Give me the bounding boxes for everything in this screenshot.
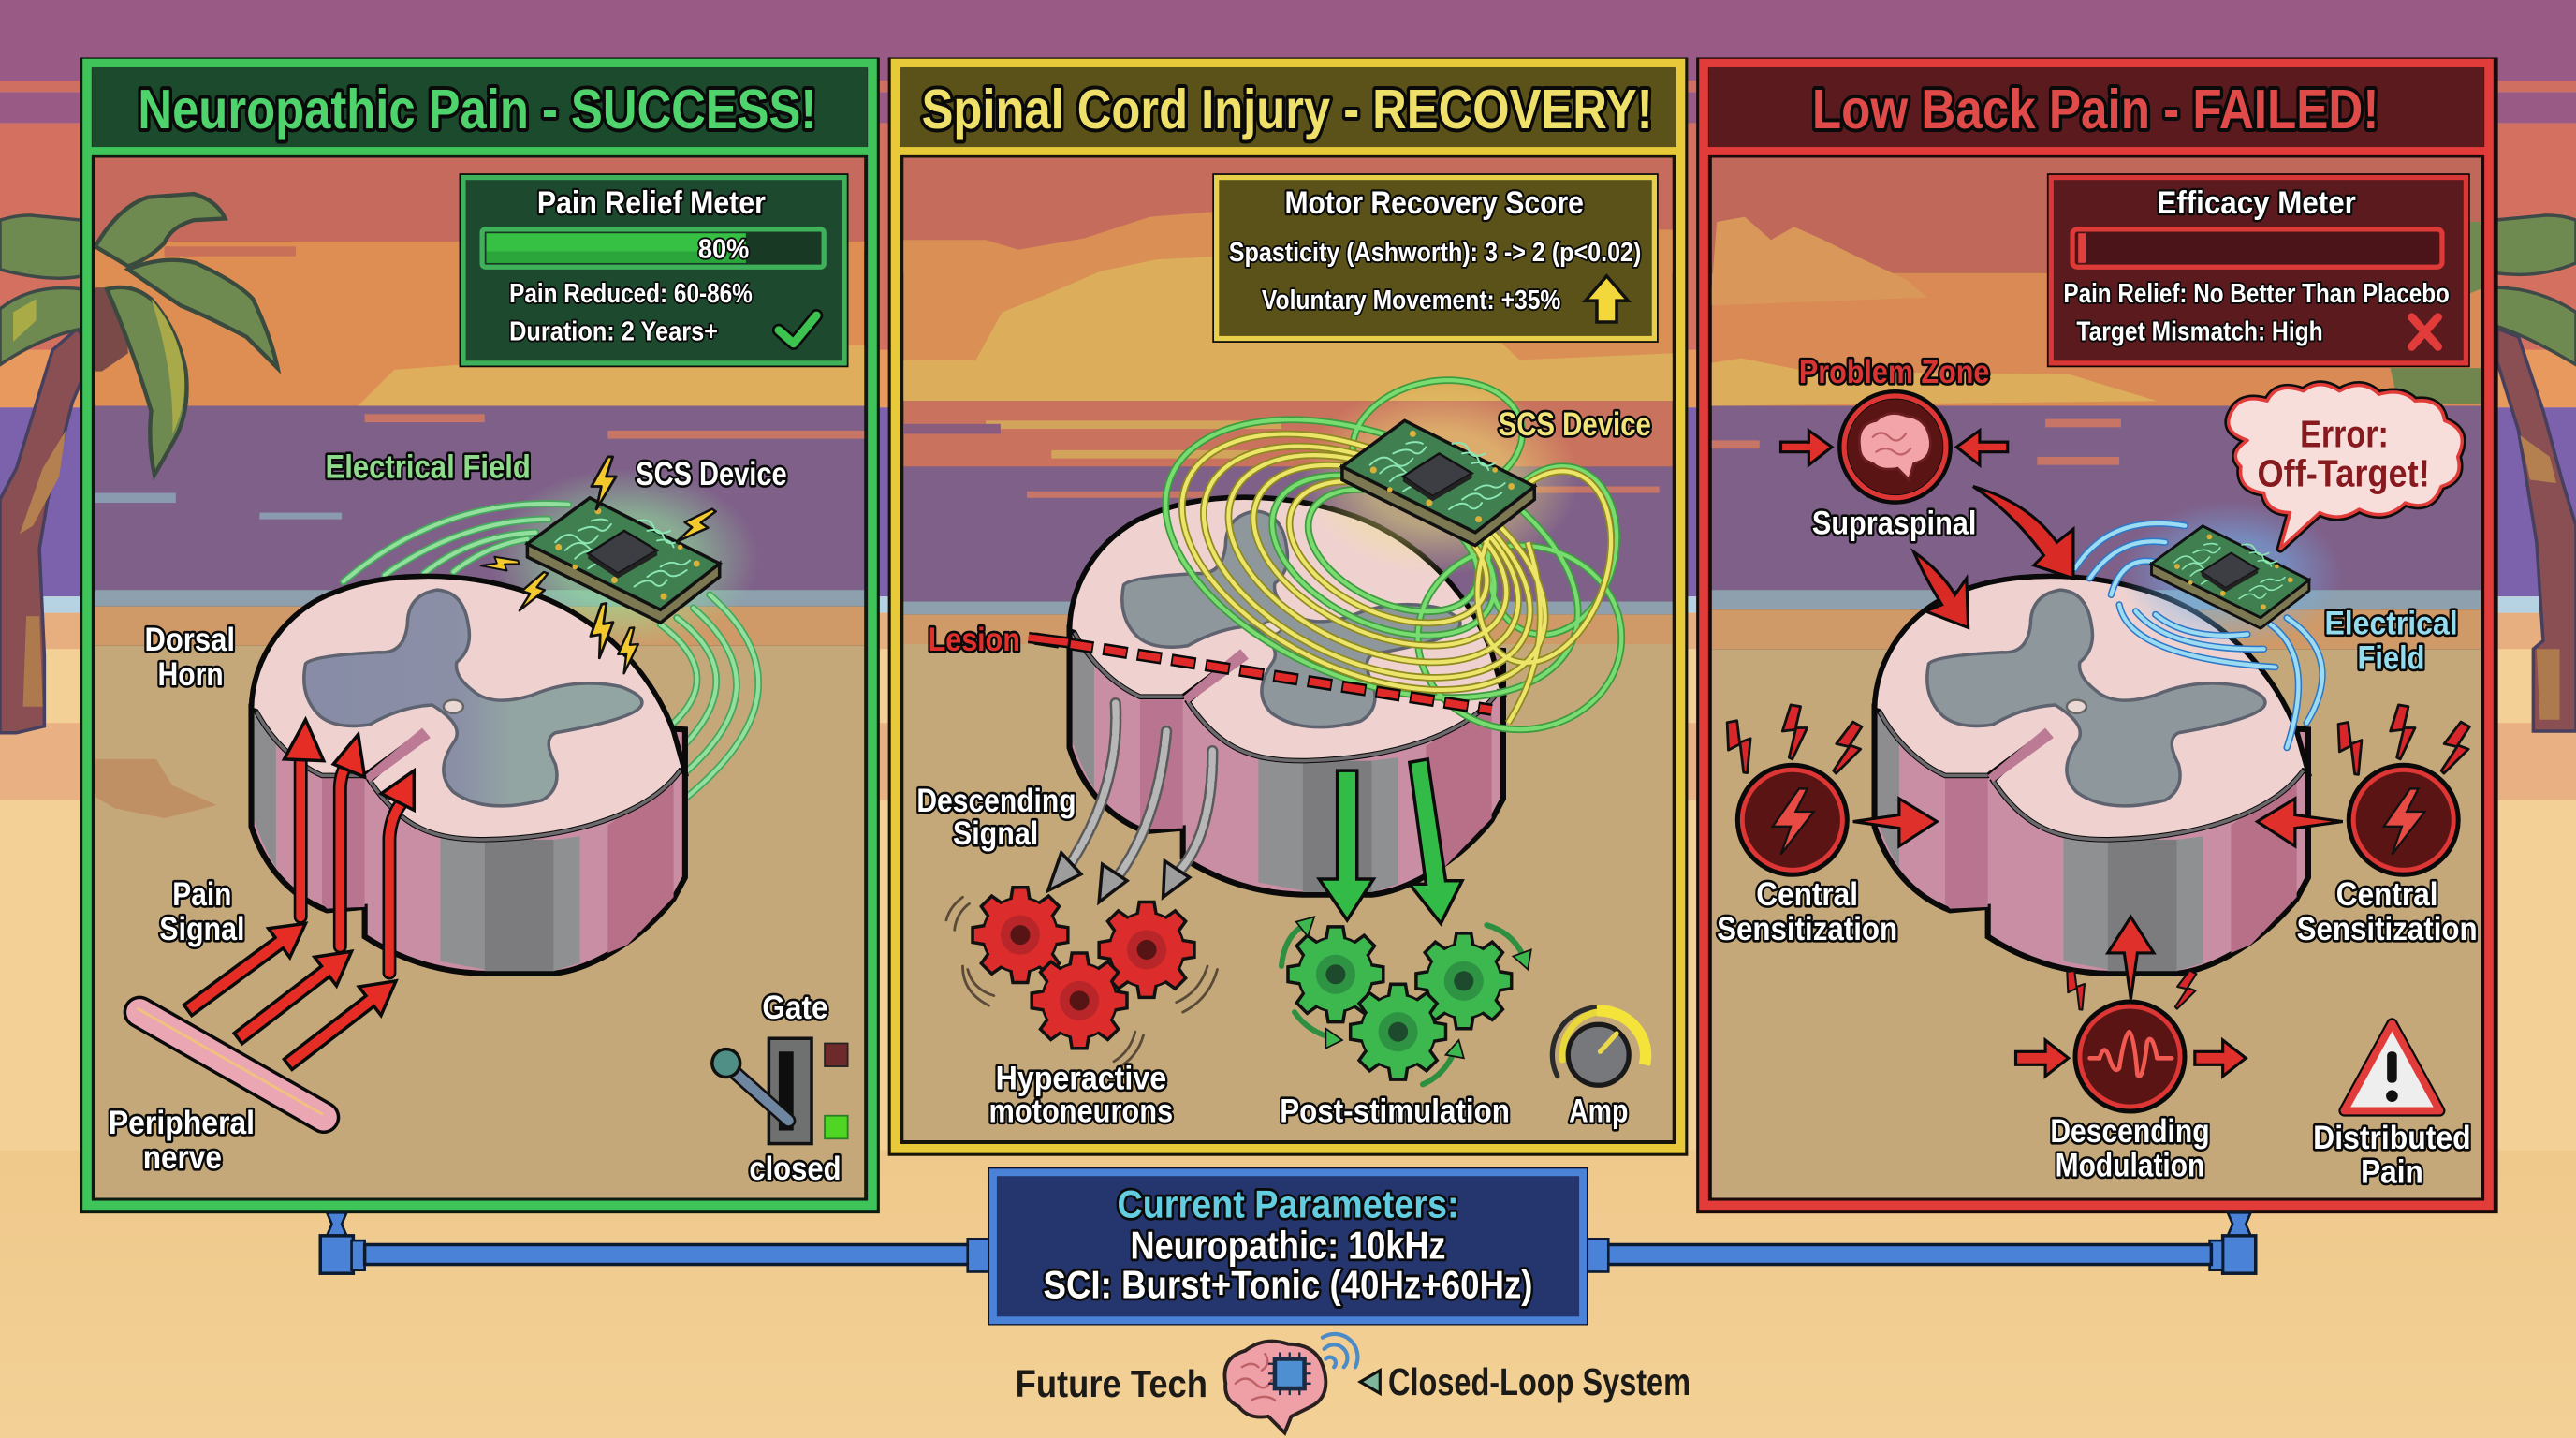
electrical field arcs	[344, 504, 758, 799]
blue electrical field	[2075, 523, 2322, 748]
curved arrows to cord	[1914, 487, 2073, 627]
icon: central sensitization left	[1720, 705, 1868, 873]
label: distributed pain: Distributed	[2313, 1120, 2471, 1156]
label: central sensitization left: Sensitization	[1717, 911, 1897, 947]
panel scene: red	[1710, 157, 2484, 1199]
panel: current parameters: Neuropathic: 10kHz	[1131, 1223, 1445, 1267]
label: SCS device: SCS Device	[636, 456, 787, 492]
spinal cord cross-section	[1875, 576, 2308, 974]
label: post-stimulation: Post-stimulation	[1280, 1093, 1510, 1130]
pain relief meter: Pain Relief Meter	[537, 185, 766, 221]
label: gate: Gate	[762, 990, 828, 1026]
speech bubble: error off-target	[2229, 385, 2462, 549]
recovered gears	[1281, 917, 1531, 1084]
label: peripheral nerve	[109, 1105, 255, 1176]
peripheral nerve arrows	[177, 909, 407, 1078]
label: peripheral nerve: Peripheral	[109, 1105, 255, 1141]
label: electrical field	[2324, 605, 2458, 676]
icon: X mark	[2411, 317, 2438, 346]
speech bubble: error off-target: Off-Target!	[2258, 452, 2430, 495]
ascending pain arrows	[285, 720, 414, 973]
label: central sensitization right: Sensitization	[2297, 911, 2478, 947]
descending signal arrows	[1048, 703, 1212, 902]
icon: warning triangle	[2345, 1023, 2439, 1110]
SCS device chip	[527, 498, 720, 623]
icon: check mark fill	[779, 315, 816, 344]
label: descending modulation: Descending	[2050, 1113, 2210, 1150]
label: closed-loop system: Closed-Loop System	[1388, 1360, 1690, 1403]
pain relief meter	[460, 173, 849, 367]
motor recovery score: Voluntary Movement: +35%	[1262, 286, 1560, 315]
label: pain signal: Pain	[172, 876, 231, 913]
label: electrical field: Electrical Field	[326, 449, 531, 486]
label: hyperactive motoneurons: motoneurons	[989, 1093, 1173, 1130]
pain relief meter: Duration: 2 Years+	[509, 316, 718, 346]
label: descending signal: Signal	[953, 815, 1038, 852]
icon: up arrow	[1586, 276, 1628, 322]
heading: neuropathic: Neuropathic Pain - SUCCESS!	[138, 78, 816, 140]
label: pain signal: Signal	[159, 911, 245, 947]
label: distributed pain: Pain	[2361, 1154, 2423, 1191]
label: descending signal	[916, 783, 1076, 852]
panel: current parameters: SCI: Burst+Tonic (40Hz+60Hz)	[1043, 1263, 1533, 1307]
label: hyperactive motoneurons: Hyperactive	[996, 1061, 1166, 1097]
pipe connectors	[320, 1212, 2256, 1273]
label: SCS device: SCS Device	[1499, 406, 1651, 443]
SCS device chip	[1342, 420, 1534, 546]
spinal cord cross-section	[252, 576, 685, 974]
efficacy meter	[2047, 173, 2470, 367]
lesion line	[1029, 638, 1492, 710]
speech bubble: error off-target: Error:	[2300, 412, 2389, 455]
motor recovery score: Motor Recovery Score	[1284, 185, 1584, 221]
arrows into brain	[1781, 431, 2008, 465]
icon: check mark	[779, 315, 816, 344]
left palm tree	[0, 215, 94, 733]
arrow to cord left	[1853, 799, 1937, 846]
icon: central sensitization right	[2331, 705, 2477, 873]
chip glow	[2119, 501, 2343, 649]
icon: descending modulation	[2061, 968, 2202, 1109]
label: central sensitization left	[1717, 876, 1897, 947]
icon: supraspinal brain	[1842, 394, 1948, 500]
label: dorsal horn: Dorsal	[144, 622, 235, 658]
label: descending modulation: Modulation	[2056, 1148, 2204, 1184]
efficacy meter: Pain Relief: No Better Than Placebo	[2063, 279, 2450, 309]
green downward arrows	[1319, 759, 1462, 923]
right palm tree	[2494, 215, 2576, 731]
label: problem zone: Problem Zone	[1799, 354, 1989, 390]
label: hyperactive motoneurons	[989, 1061, 1173, 1130]
panel scene: green	[76, 157, 866, 1199]
motor recovery score: Spasticity (Ashworth): 3 -> 2 (p<0.02)	[1229, 238, 1641, 268]
panel: low back pain	[1696, 57, 2498, 1213]
pain relief meter: Pain Reduced: 60-86%	[509, 279, 753, 309]
label: central sensitization left: Central	[1756, 876, 1858, 913]
chip glow	[490, 468, 759, 649]
label: peripheral nerve: nerve	[143, 1139, 222, 1176]
label: supraspinal: Supraspinal	[1812, 505, 1976, 541]
panel: current parameters: Current Parameters:	[1117, 1182, 1459, 1226]
efficacy meter: Efficacy Meter	[2157, 185, 2356, 221]
spinal cord cross-section	[1070, 497, 1503, 895]
label: descending signal: Descending	[916, 783, 1076, 819]
peripheral nerve	[138, 1009, 324, 1117]
lightning sparks	[479, 457, 718, 674]
label: electrical field: Electrical	[2324, 605, 2458, 641]
label: central sensitization right	[2297, 876, 2478, 947]
electrical field loops	[1125, 365, 1635, 753]
label: lesion: Lesion	[929, 622, 1020, 658]
label: closed: closed	[749, 1151, 842, 1187]
label: distributed pain	[2313, 1120, 2471, 1191]
icon: brain with chip and wifi	[1224, 1334, 1357, 1432]
chip glow	[1299, 385, 1579, 575]
label: dorsal horn: Horn	[157, 656, 224, 693]
amp knob	[1552, 1007, 1646, 1085]
up arrow to cord	[2108, 917, 2154, 999]
panel: current parameters	[988, 1167, 1588, 1325]
efficacy meter: Target Mismatch: High	[2076, 316, 2323, 346]
arrows beside modulation	[2016, 1040, 2246, 1077]
label: electrical field: Field	[2358, 639, 2425, 676]
heading: low back pain: Low Back Pain - FAILED!	[1812, 78, 2378, 140]
gate lever switch	[712, 1038, 848, 1144]
panel scene: yellow	[902, 157, 1674, 1142]
icon: left triangle	[1360, 1371, 1380, 1393]
SCS device chip	[2152, 526, 2309, 628]
arrow to cord right	[2258, 799, 2343, 846]
panel: neuropathic pain	[76, 57, 880, 1213]
label: central sensitization right: Central	[2336, 876, 2438, 913]
motor recovery score	[1212, 173, 1659, 343]
label: descending modulation	[2050, 1113, 2210, 1184]
label: dorsal horn	[144, 622, 235, 693]
panel: spinal cord injury	[888, 57, 1688, 1156]
pain relief meter: 80%	[698, 235, 749, 265]
label: pain signal	[159, 876, 245, 947]
heading: spinal cord injury: Spinal Cord Injury - RECOVERY!	[922, 78, 1653, 140]
hyperactive gears	[946, 888, 1218, 1068]
label: amp: Amp	[1569, 1093, 1628, 1130]
label: future tech: Future Tech	[1016, 1362, 1208, 1405]
